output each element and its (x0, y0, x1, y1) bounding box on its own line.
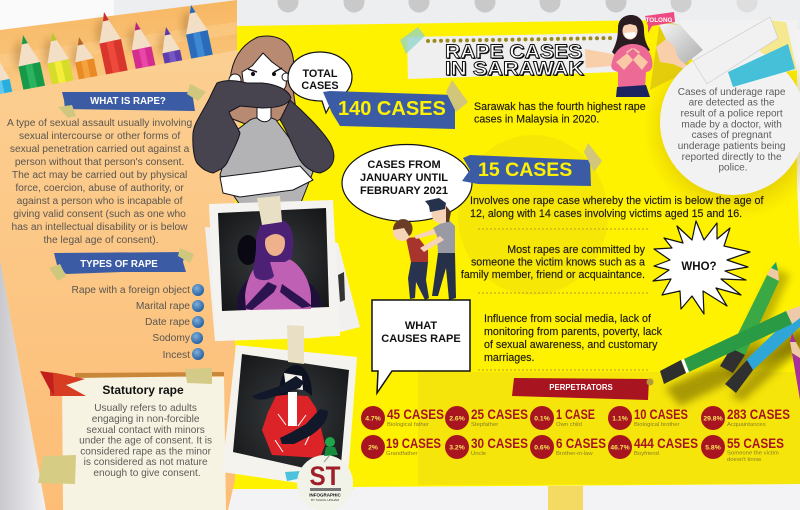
text: who commits rapes: Most rapes are committed by (507, 244, 646, 256)
perpetrators: uncle: Uncle (471, 451, 487, 457)
note: statutory rape: Usually refers to adults (94, 403, 197, 414)
figure: shadow attacker (238, 235, 258, 265)
perpetrators: uncle: 3.2% (449, 444, 465, 452)
banner: perpetrators: PERPETRATORS (549, 383, 613, 392)
pencil: blue (725, 308, 800, 393)
ribbon: 15 cases (462, 143, 602, 186)
note: statutory rape: is considered as not mature (84, 457, 208, 468)
speech bubble: cases from january until february 2021: CASES FROM (367, 159, 441, 171)
definition text block: person without that person's consent. (15, 157, 184, 168)
perpetrators: acquaintances: 283 CASES (727, 407, 790, 422)
definition text block: sexual penetration carried out against a (10, 144, 190, 155)
burst: who: WHO? (681, 261, 717, 273)
perpetrators: boyfriend: 46.7% (610, 444, 630, 452)
title: rape cases in sarawak: RAPE CASES (446, 43, 583, 64)
perpetrators: stranger: Someone the victim (727, 450, 779, 456)
text: causes: monitoring from parents, poverty, lack (484, 326, 663, 338)
logo badge: st infographic: INFOGRAPHIC (309, 492, 342, 498)
perpetrators: boyfriend (608, 435, 698, 459)
burst: who (653, 221, 750, 314)
list: types of rape: Rape with a foreign object (71, 285, 190, 296)
pencil: green (12, 33, 52, 125)
fact: victims ages: Involves one rape case whereby the victim is below the age of (470, 195, 764, 207)
fact: fourth highest: cases in Malaysia in 2020. (474, 114, 599, 126)
perpetrators: boyfriend: Boyfriend (634, 451, 659, 457)
perpetrators: biological father: 45 CASES (387, 407, 444, 422)
peeled paper behind girl (658, 20, 797, 85)
perpetrators: acquaintances (701, 406, 790, 430)
text: causes: marriages. (484, 352, 534, 364)
perpetrators: grandfather: Grandfather (386, 451, 417, 457)
illustration: woman with mouth covered (193, 36, 334, 205)
heading ribbon: types of rape: TYPES OF RAPE (80, 259, 158, 270)
logo badge: st infographic (297, 455, 353, 510)
title: rape cases in sarawak: IN SARAWAK (446, 60, 585, 81)
perpetrators: own child: 1 CASE (556, 407, 595, 422)
speech bubble: total cases (288, 52, 352, 113)
yellow main panel (225, 20, 800, 510)
photo: woman being silenced (222, 325, 357, 490)
perpetrators: acquaintances: Acquaintances (727, 422, 766, 428)
perpetrators: grandfather: 2% (368, 444, 378, 452)
perpetrators: uncle: 30 CASES (471, 436, 528, 451)
perpetrators: biological brother: 10 CASES (634, 407, 688, 422)
pencil: green back (720, 262, 779, 373)
ribbon: 140 cases: 140 CASES (338, 98, 446, 120)
coloured pencils (660, 262, 800, 406)
banner: perpetrators (512, 378, 654, 400)
divider lines (478, 229, 650, 370)
speech bubble: cases from january until february 2021: FEBRUARY 2021 (360, 185, 448, 197)
perpetrators: brother-in-law (530, 435, 606, 459)
perpetrators: biological brother: Biological brother (634, 422, 680, 428)
note: statutory rape: considered rape as the minor (80, 446, 212, 458)
speech bubble: cases from january until february 2021: JANUARY UNTIL (360, 172, 448, 184)
pencil: red (93, 10, 136, 112)
fact: fourth highest: Sarawak has the fourth highest rape (474, 101, 646, 113)
circle text: underage cases: underage patients being (678, 141, 786, 152)
text: who commits rapes: someone the victim knows such as a (471, 256, 645, 268)
circle text: underage cases: made by a doctor, with (681, 120, 782, 130)
perpetrators: stranger: 55 CASES (727, 436, 784, 451)
text: causes: of sexual awareness, and customary (484, 339, 658, 351)
pencil: yellow (41, 30, 81, 122)
illustration: fist and white circle with tapes (656, 17, 800, 195)
circle text: underage cases: are detected as the (689, 98, 775, 108)
definition text block: force, coercion, abuse of authority, or (15, 183, 184, 194)
speech bubble: cases from january until february 2021 (342, 144, 472, 222)
perpetrators: grandfather (361, 435, 441, 459)
perpetrators: biological father: Biological father (387, 422, 429, 428)
list: types of rape: Incest (163, 350, 190, 361)
photo: woman with shadow hands (205, 196, 360, 341)
list: types of rape: Sodomy (152, 333, 191, 344)
list: types of rape: Marital rape (136, 301, 190, 312)
note: statutory rape (38, 368, 226, 510)
perpetrators: brother-in-law: Brother-in-law (556, 451, 593, 457)
note: statutory rape: engaging in non-forcible (92, 414, 200, 425)
circle text: underage cases: reported directly to the (682, 152, 782, 163)
perpetrators: stepfather (445, 406, 528, 430)
heading ribbon: what is rape (58, 84, 206, 118)
perpetrators: biological brother: 1.1% (612, 416, 628, 422)
perpetrators: boyfriend: 444 CASES (634, 436, 698, 451)
heading ribbon: types of rape (49, 248, 194, 281)
circle text: underage cases: police. (718, 162, 748, 174)
ribbon: 140 cases (323, 80, 468, 129)
logo badge: st infographic: BY SUHAIL HISHAM (311, 498, 340, 502)
definition text block: giving valid consent (such as one who (13, 209, 186, 220)
pencil: purple (790, 333, 800, 400)
pencil: green front (660, 306, 800, 384)
circle text: underage cases: Cases of underage rape (678, 87, 786, 98)
circle text: underage cases: cases of pregnant (692, 130, 772, 141)
list: types of rape (71, 284, 204, 361)
pencil: blue (180, 3, 218, 84)
heading ribbon: what is rape: WHAT IS RAPE? (90, 96, 166, 107)
fact: victims ages: 12, along with 14 cases involving victims aged 15 and 16. (470, 208, 742, 220)
perpetrators: biological father: 4.7% (365, 416, 381, 422)
pencil: magenta (126, 20, 162, 99)
speech box: what causes rape (372, 300, 470, 393)
circle text: underage cases: result of a police report (680, 108, 783, 120)
speech bubble: total cases: TOTAL (303, 68, 338, 80)
title: rape cases in sarawak (400, 27, 620, 81)
list: types of rape: Date rape (145, 317, 190, 328)
speech box: what causes rape: CAUSES RAPE (381, 333, 461, 345)
definition text block: The act may be carried out by physical (12, 170, 187, 181)
speech box: what causes rape: WHAT (405, 320, 437, 332)
illustration: police officer and arrested boy (393, 198, 456, 300)
perpetrators: stranger (701, 435, 784, 463)
perpetrators: stepfather: 25 CASES (471, 407, 528, 422)
text: causes: Influence from social media, lack of (484, 313, 651, 325)
rear folder with pencils (0, 0, 237, 152)
perpetrators: stepfather: Stepfather (471, 422, 498, 428)
definition text block: against a person who is incapable of (17, 196, 183, 207)
perpetrators: grandfather: 19 CASES (386, 436, 441, 451)
title: rape cases in sarawak: RAPE CASES (445, 42, 582, 63)
note: statutory rape: sexual contact with minors (86, 425, 205, 436)
logo badge: st infographic: ST (310, 461, 341, 491)
perpetrators: biological father (361, 406, 444, 430)
perpetrators: biological brother (608, 406, 688, 430)
perpetrators: own child: 0.1% (534, 416, 550, 422)
pencil: purple (157, 25, 188, 92)
speech bubble: total cases: CASES (301, 80, 339, 92)
perpetrators: own child: Own child (556, 422, 582, 428)
definition text block: has an intellectual disability or is below (12, 222, 188, 233)
note: statutory rape: Statutory rape (102, 383, 184, 397)
perpetrators: stepfather: 2.6% (449, 416, 465, 422)
title: rape cases in sarawak: IN SARAWAK (445, 59, 584, 80)
perpetrators: brother-in-law: 6 CASES (556, 436, 606, 451)
definition text block: A type of sexual assault usually involving (7, 118, 192, 129)
illustration: girl calling for help (585, 12, 675, 97)
ribbon: 15 cases: 15 CASES (478, 159, 572, 181)
perpetrators: stranger: 5.8% (705, 444, 721, 452)
definition text block: sexual intercourse or other forms of (19, 131, 180, 142)
note: statutory rape: enough to give consent. (93, 468, 201, 479)
tag: tolong: TOLONG (646, 17, 673, 24)
perpetrators: uncle (445, 435, 528, 459)
perpetrators: brother-in-law: 0.6% (534, 444, 550, 452)
perpetrators: acquaintances: 29.8% (703, 416, 723, 422)
pencil: cyan (0, 52, 24, 152)
text: who commits rapes: family member, friend or acquaintance. (461, 269, 645, 281)
definition text block: the legal age of consent). (43, 235, 159, 246)
orange folder panel (0, 50, 245, 510)
perpetrators: stranger: doesn't know (727, 457, 762, 463)
perpetrators: own child (530, 406, 595, 430)
icon: green pin (324, 437, 338, 462)
note: statutory rape: under the age of consent. It is (79, 436, 212, 446)
pencil: orange (70, 35, 104, 111)
